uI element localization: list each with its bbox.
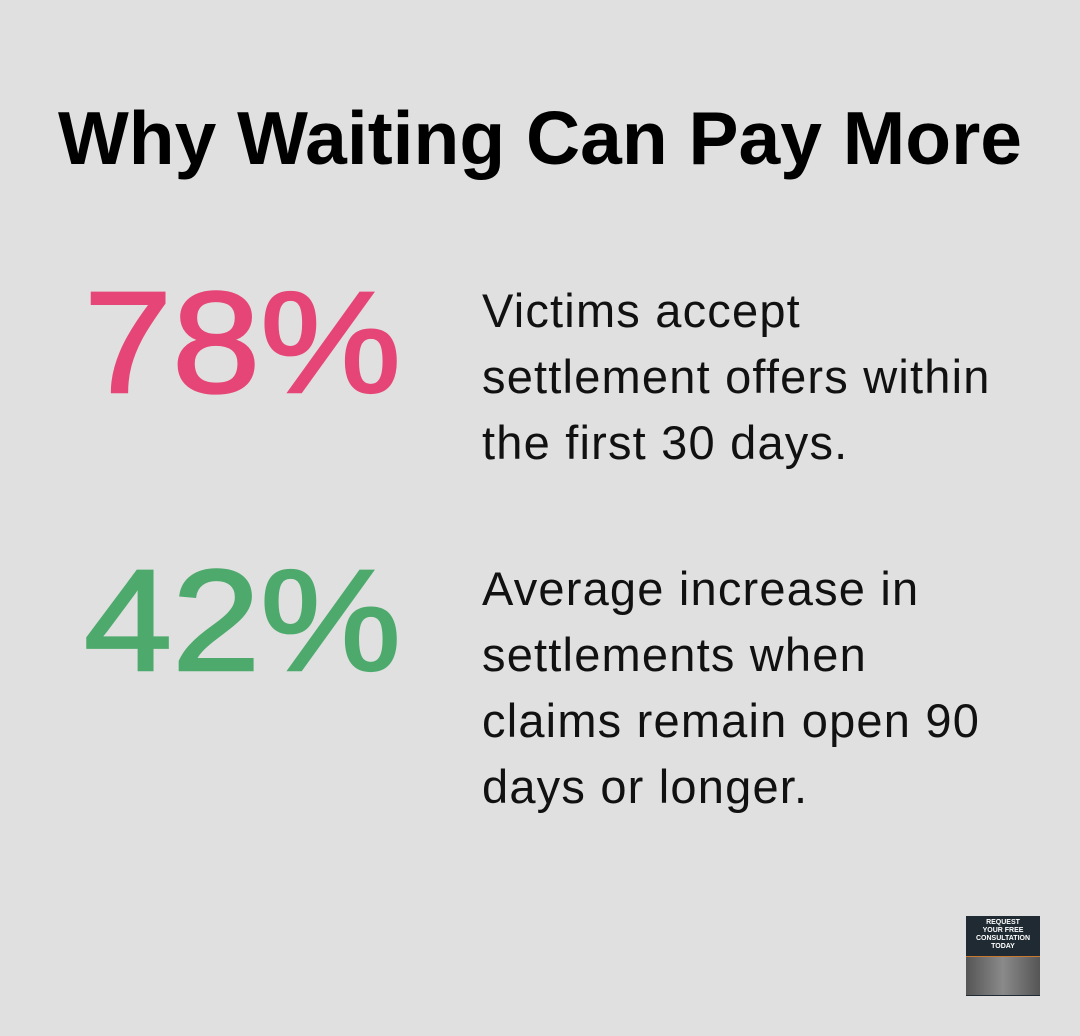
text: 42% description: settlements when xyxy=(482,628,867,681)
text: 78% description: Victims accept xyxy=(482,284,801,337)
stat: 78%: 78% xyxy=(84,262,401,423)
title: Why Waiting Can Pay More xyxy=(58,96,1022,180)
text: 42% description xyxy=(482,562,980,813)
text: 78% description: the first 30 days. xyxy=(482,416,848,469)
stat: 42%: 42% xyxy=(84,540,401,701)
logo: consultation badge xyxy=(966,916,1040,996)
text: 42% description: days or longer. xyxy=(482,760,808,813)
text: 78% description: settlement offers within xyxy=(482,350,991,403)
logo: consultation badge: CONSULTATION xyxy=(976,935,1030,942)
text: 78% description xyxy=(482,284,991,469)
logo: consultation badge: YOUR FREE xyxy=(983,927,1023,934)
text: 42% description: Average increase in xyxy=(482,562,919,615)
logo: consultation badge: TODAY xyxy=(991,943,1015,950)
logo: consultation badge: REQUEST xyxy=(986,919,1020,926)
text: 42% description: claims remain open 90 xyxy=(482,694,980,747)
